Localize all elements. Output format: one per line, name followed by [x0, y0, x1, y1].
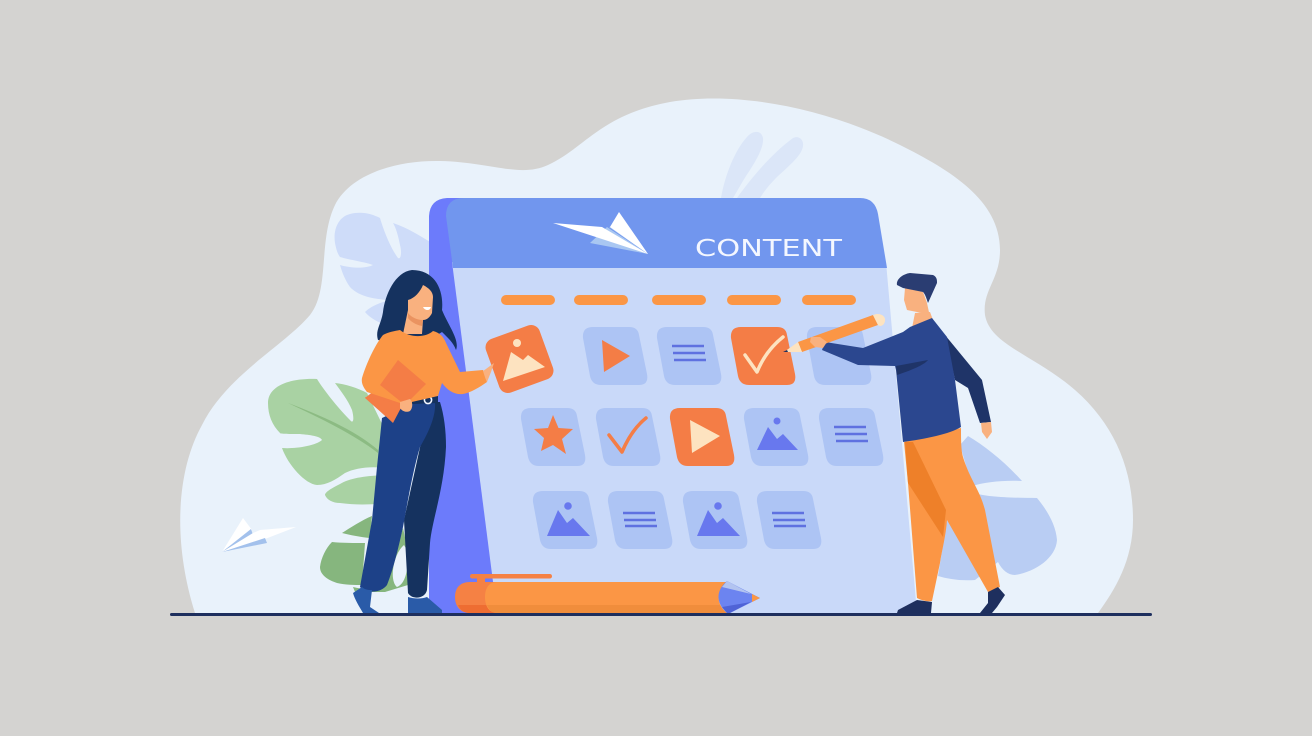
smile [423, 307, 431, 310]
sweater [362, 330, 487, 404]
card: check [596, 408, 660, 466]
neck [912, 312, 933, 328]
belt ring [424, 396, 432, 404]
card: image featured [483, 322, 556, 396]
pants front leg [360, 402, 435, 592]
hand hanging [981, 422, 992, 439]
card: star [521, 408, 585, 466]
background blob [180, 99, 1133, 613]
belt [412, 394, 438, 404]
card: play featured [670, 408, 734, 466]
shoe right [408, 597, 442, 613]
pencil tip [718, 581, 760, 614]
pants back leg [404, 402, 446, 598]
leaf: blue right [938, 436, 1057, 580]
card: image [683, 491, 747, 549]
leaf: pale blue back left [335, 213, 432, 325]
hand on folder [400, 399, 412, 412]
paper plane: small left [222, 518, 296, 552]
shoe left [897, 600, 932, 613]
folder lower [365, 397, 403, 423]
card: text behind pencil [807, 327, 871, 385]
leaf vein [288, 403, 378, 453]
pants shadow [905, 442, 946, 537]
figure: woman [353, 270, 494, 613]
paper plane: header [553, 212, 648, 254]
calendar side [429, 198, 515, 613]
card: check featured [731, 327, 795, 385]
card: text [608, 491, 672, 549]
card: text [657, 327, 721, 385]
hand pointing [483, 363, 494, 382]
hand holding pencil [810, 337, 827, 348]
folder back [365, 372, 415, 423]
back arm [945, 335, 991, 423]
calendar header [446, 198, 887, 268]
pencil: large bottom [455, 574, 760, 614]
neck shadow [408, 313, 423, 326]
card: image [533, 491, 597, 549]
card: image [744, 408, 808, 466]
calendar page [452, 262, 917, 613]
sweater [822, 318, 961, 442]
face and neck [403, 285, 433, 334]
leaf: dark green lower [320, 516, 408, 592]
card: text [819, 408, 883, 466]
weekday dashes [501, 295, 856, 305]
hair [897, 273, 937, 303]
calendar [429, 198, 917, 613]
shoe left [353, 587, 379, 613]
ground line [170, 613, 1152, 616]
card: play [583, 327, 647, 385]
folder front [380, 360, 426, 405]
figure: man [783, 273, 1005, 613]
sleeve shadow [896, 360, 928, 375]
leaf: green monstera [268, 379, 385, 504]
shoe right [980, 587, 1005, 613]
face [904, 288, 930, 317]
hair [377, 270, 457, 350]
leaf: pale blue top sprigs [721, 132, 803, 198]
heading: content: CONTENT [695, 236, 843, 262]
pencil held [783, 314, 885, 352]
card: text [757, 491, 821, 549]
pants [904, 428, 1000, 601]
